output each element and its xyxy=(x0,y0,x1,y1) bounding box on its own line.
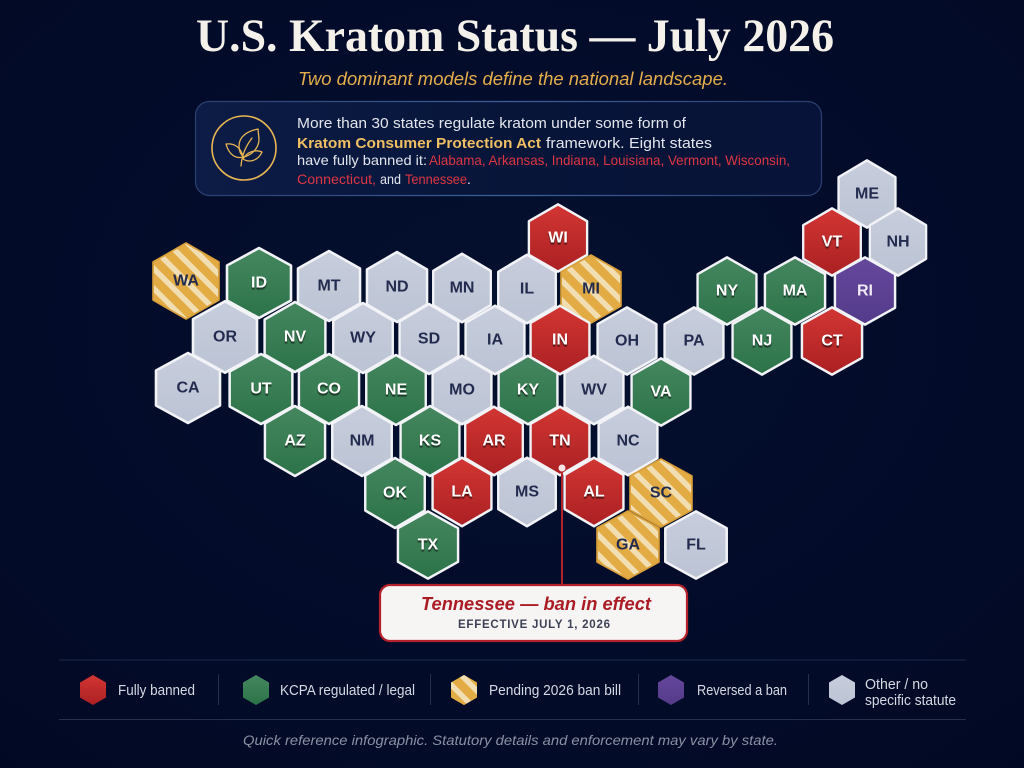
state NJ: NJ xyxy=(752,332,772,350)
callout: Tennessee: Tennessee — ban in effect xyxy=(421,594,652,614)
state NV xyxy=(265,302,325,372)
state SC xyxy=(630,459,692,527)
state WA xyxy=(153,243,219,319)
text: summary: More than 30 states regulate kratom under some form of xyxy=(297,115,687,132)
state MI: MI xyxy=(582,280,600,298)
state CT: CT xyxy=(821,332,843,350)
legend item: KCPA regulated: KCPA regulated / legal xyxy=(280,683,415,699)
state MA: MA xyxy=(783,282,808,300)
callout: Tennessee xyxy=(380,464,687,641)
state SD: SD xyxy=(418,330,440,348)
text: summary: Alabama, Arkansas, Indiana, Louisiana, Vermont, Wisconsin, xyxy=(429,152,790,168)
legend xyxy=(59,660,966,720)
callout: Tennessee: EFFECTIVE JULY 1, 2026 xyxy=(458,619,610,631)
state NM xyxy=(332,406,392,476)
state FL: FL xyxy=(686,536,706,554)
state NY xyxy=(698,257,756,325)
state IA: IA xyxy=(487,332,503,348)
state NV: NV xyxy=(284,328,306,346)
state NH: NH xyxy=(886,234,910,250)
legend item: other: specific statute xyxy=(865,693,956,709)
legend item: pending ban bill xyxy=(451,675,621,705)
state MO: MO xyxy=(449,382,475,398)
legend item: reversed a ban: Reversed a ban xyxy=(697,683,787,699)
state CA xyxy=(156,353,220,423)
state AL: AL xyxy=(583,484,605,500)
hexagon map xyxy=(153,160,926,579)
state VT xyxy=(803,208,861,276)
state NC xyxy=(599,407,657,475)
state VT: VT xyxy=(822,234,842,250)
text: summary: framework. Eight states xyxy=(546,135,712,152)
state MA xyxy=(765,257,825,325)
legend item: KCPA regulated xyxy=(243,675,415,705)
state MN: MN xyxy=(450,280,474,296)
state KY xyxy=(499,356,557,424)
state WV xyxy=(565,356,623,424)
state WI: WI xyxy=(548,230,568,246)
state AZ: AZ xyxy=(284,432,306,450)
state CO: CO xyxy=(317,380,341,398)
legend item: fully banned: Fully banned xyxy=(118,683,195,699)
state WA: WA xyxy=(173,272,199,290)
state UT xyxy=(230,354,292,424)
state WV: WV xyxy=(581,382,607,398)
state UT: UT xyxy=(250,380,272,398)
state FL xyxy=(665,511,727,579)
state RI xyxy=(835,257,895,325)
state OR xyxy=(193,301,257,373)
state PA: PA xyxy=(683,332,705,350)
state OR: OR xyxy=(213,328,237,346)
state ND: ND xyxy=(385,278,409,296)
state OH: OH xyxy=(615,332,639,350)
state WY xyxy=(333,303,393,373)
state MT: MT xyxy=(317,278,341,294)
state MO xyxy=(433,356,491,424)
state NM: NM xyxy=(350,432,374,450)
state IN xyxy=(531,306,589,374)
legend item: reversed a ban xyxy=(658,675,787,705)
legend item: other xyxy=(829,675,956,709)
footer note: Quick reference infographic. Statutory details and enforcement may vary by state. xyxy=(243,732,778,748)
state ME xyxy=(839,160,895,228)
state ND xyxy=(367,252,427,322)
legend item: other: Other / no xyxy=(865,677,928,693)
state GA xyxy=(597,511,659,579)
state RI: RI xyxy=(857,282,873,300)
state NH xyxy=(870,208,926,276)
title: U.S. Kratom Status — July 2026 xyxy=(196,10,834,62)
state MN xyxy=(433,254,491,322)
state TN xyxy=(531,407,589,475)
text: summary: Tennessee xyxy=(405,171,467,187)
state LA: LA xyxy=(451,484,473,500)
icon: leaf in circle xyxy=(212,116,276,180)
state AZ xyxy=(265,406,325,476)
state ME: ME xyxy=(855,186,879,202)
text: summary: have fully banned it: xyxy=(297,152,427,168)
state IL: IL xyxy=(520,280,534,298)
state AL xyxy=(565,458,623,526)
state MS: MS xyxy=(515,484,539,500)
state ID xyxy=(227,248,291,318)
state IN: IN xyxy=(552,332,568,348)
text: summary: Kratom Consumer Protection Act xyxy=(297,135,541,152)
state KS xyxy=(401,406,459,476)
state WI xyxy=(529,204,587,272)
state MS xyxy=(498,458,556,526)
state VA: VA xyxy=(650,384,672,400)
state AR xyxy=(465,407,523,475)
state IL xyxy=(498,255,556,323)
state ID: ID xyxy=(251,274,267,292)
state VA xyxy=(632,358,690,426)
state MI xyxy=(561,255,621,323)
state NC: NC xyxy=(616,432,640,450)
state TX xyxy=(398,511,458,579)
legend item: fully banned xyxy=(80,675,195,705)
state PA xyxy=(665,307,723,375)
state CO xyxy=(299,354,359,424)
text: summary: . xyxy=(467,171,471,187)
legend item: pending ban bill: Pending 2026 ban bill xyxy=(489,683,621,699)
state OK xyxy=(365,458,425,528)
state IA xyxy=(466,306,524,374)
state NE xyxy=(366,355,426,425)
state KS: KS xyxy=(419,432,441,450)
state NJ xyxy=(733,307,791,375)
state CT xyxy=(802,307,862,375)
state KY: KY xyxy=(517,382,539,398)
state NY: NY xyxy=(716,282,738,300)
state WY: WY xyxy=(350,330,376,346)
panel: summary callout xyxy=(196,102,822,196)
state AR: AR xyxy=(482,432,506,450)
state OH xyxy=(598,307,656,375)
state SD xyxy=(400,304,458,374)
state CA: CA xyxy=(176,380,200,396)
state LA xyxy=(433,458,491,526)
state OK: OK xyxy=(383,484,407,502)
state SC: SC xyxy=(650,484,673,502)
subtitle: Two dominant models define the national landscape. xyxy=(298,69,728,89)
state MT xyxy=(298,251,360,321)
state GA: GA xyxy=(616,536,640,554)
state TX: TX xyxy=(418,536,439,554)
text: summary: Connecticut, xyxy=(297,171,376,187)
state NE: NE xyxy=(385,382,407,398)
text: summary xyxy=(297,115,790,187)
text: summary: and xyxy=(380,171,401,187)
state TN: TN xyxy=(549,432,571,450)
